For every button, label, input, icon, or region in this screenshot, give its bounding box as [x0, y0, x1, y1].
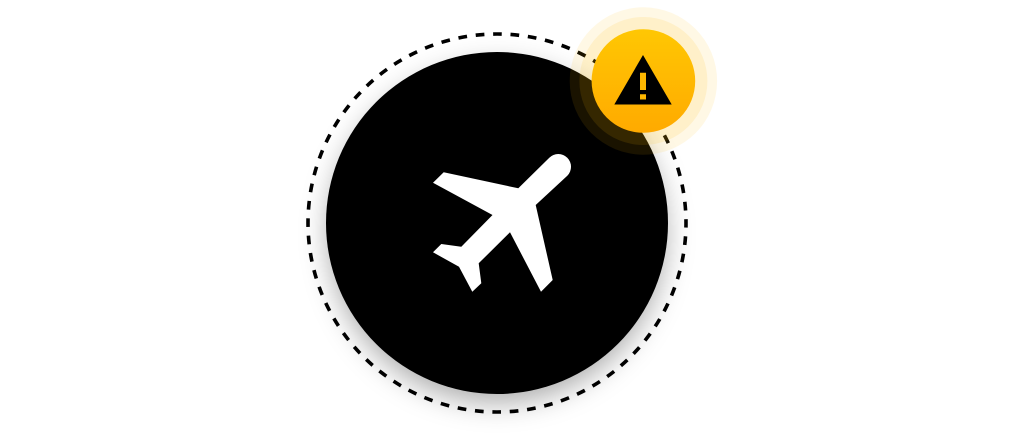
badge halo: inner [579, 17, 707, 145]
warning badge [570, 7, 717, 155]
drop shadow [329, 66, 665, 402]
icon: exclamation mark [640, 73, 646, 100]
badge halo: outer [570, 7, 717, 155]
dashed ring [308, 34, 686, 412]
icon: airplane [433, 154, 571, 292]
icon: warning triangle [614, 55, 672, 104]
badge disc [592, 29, 695, 133]
main black circle [326, 52, 668, 394]
